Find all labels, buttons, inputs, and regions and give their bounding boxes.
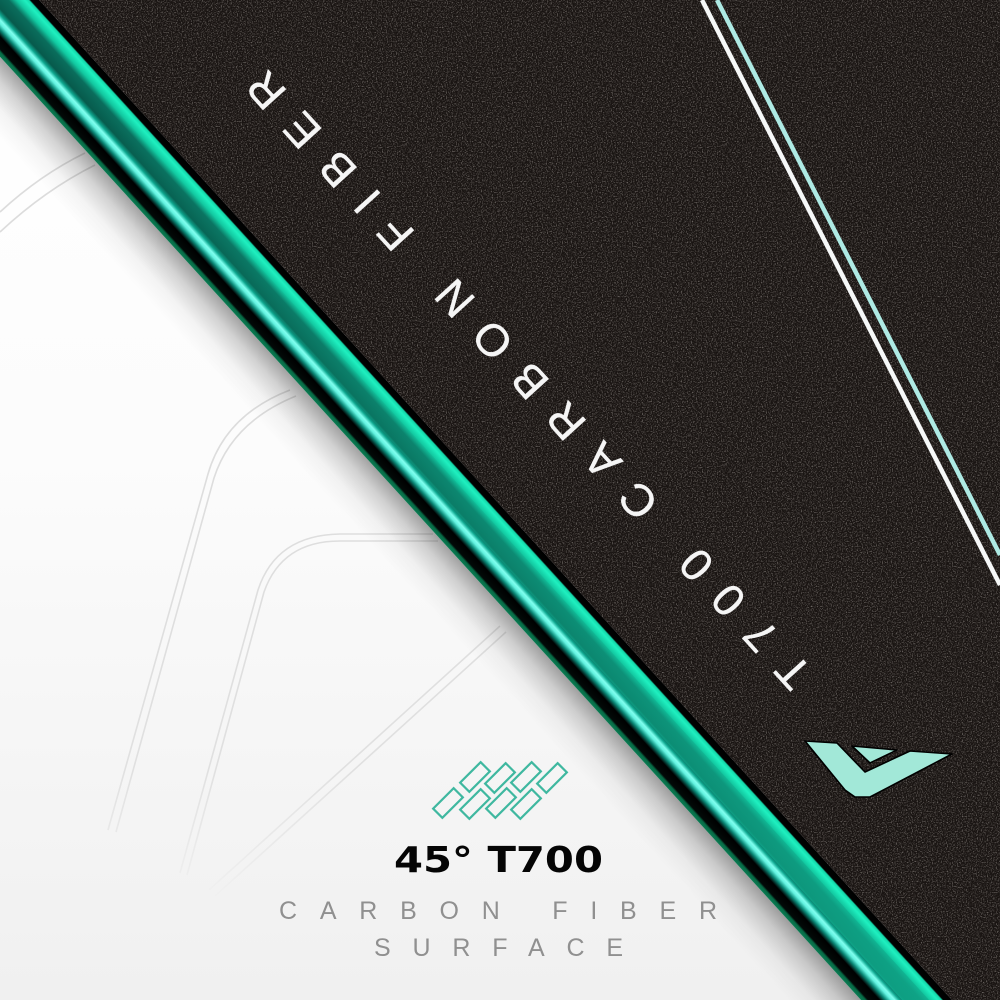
rotated panel text: T700 CARBON FIBER bbox=[236, 61, 821, 699]
heading: 45° T700 bbox=[394, 840, 603, 881]
brand logo bbox=[805, 741, 952, 797]
subtitle line one: CARBON FIBER bbox=[279, 897, 717, 925]
panel stripes bbox=[702, 0, 1000, 585]
subtitle line two: SURFACE bbox=[374, 934, 623, 962]
background line art bbox=[0, 153, 506, 896]
icon: carbon weave bricks bbox=[433, 762, 567, 819]
